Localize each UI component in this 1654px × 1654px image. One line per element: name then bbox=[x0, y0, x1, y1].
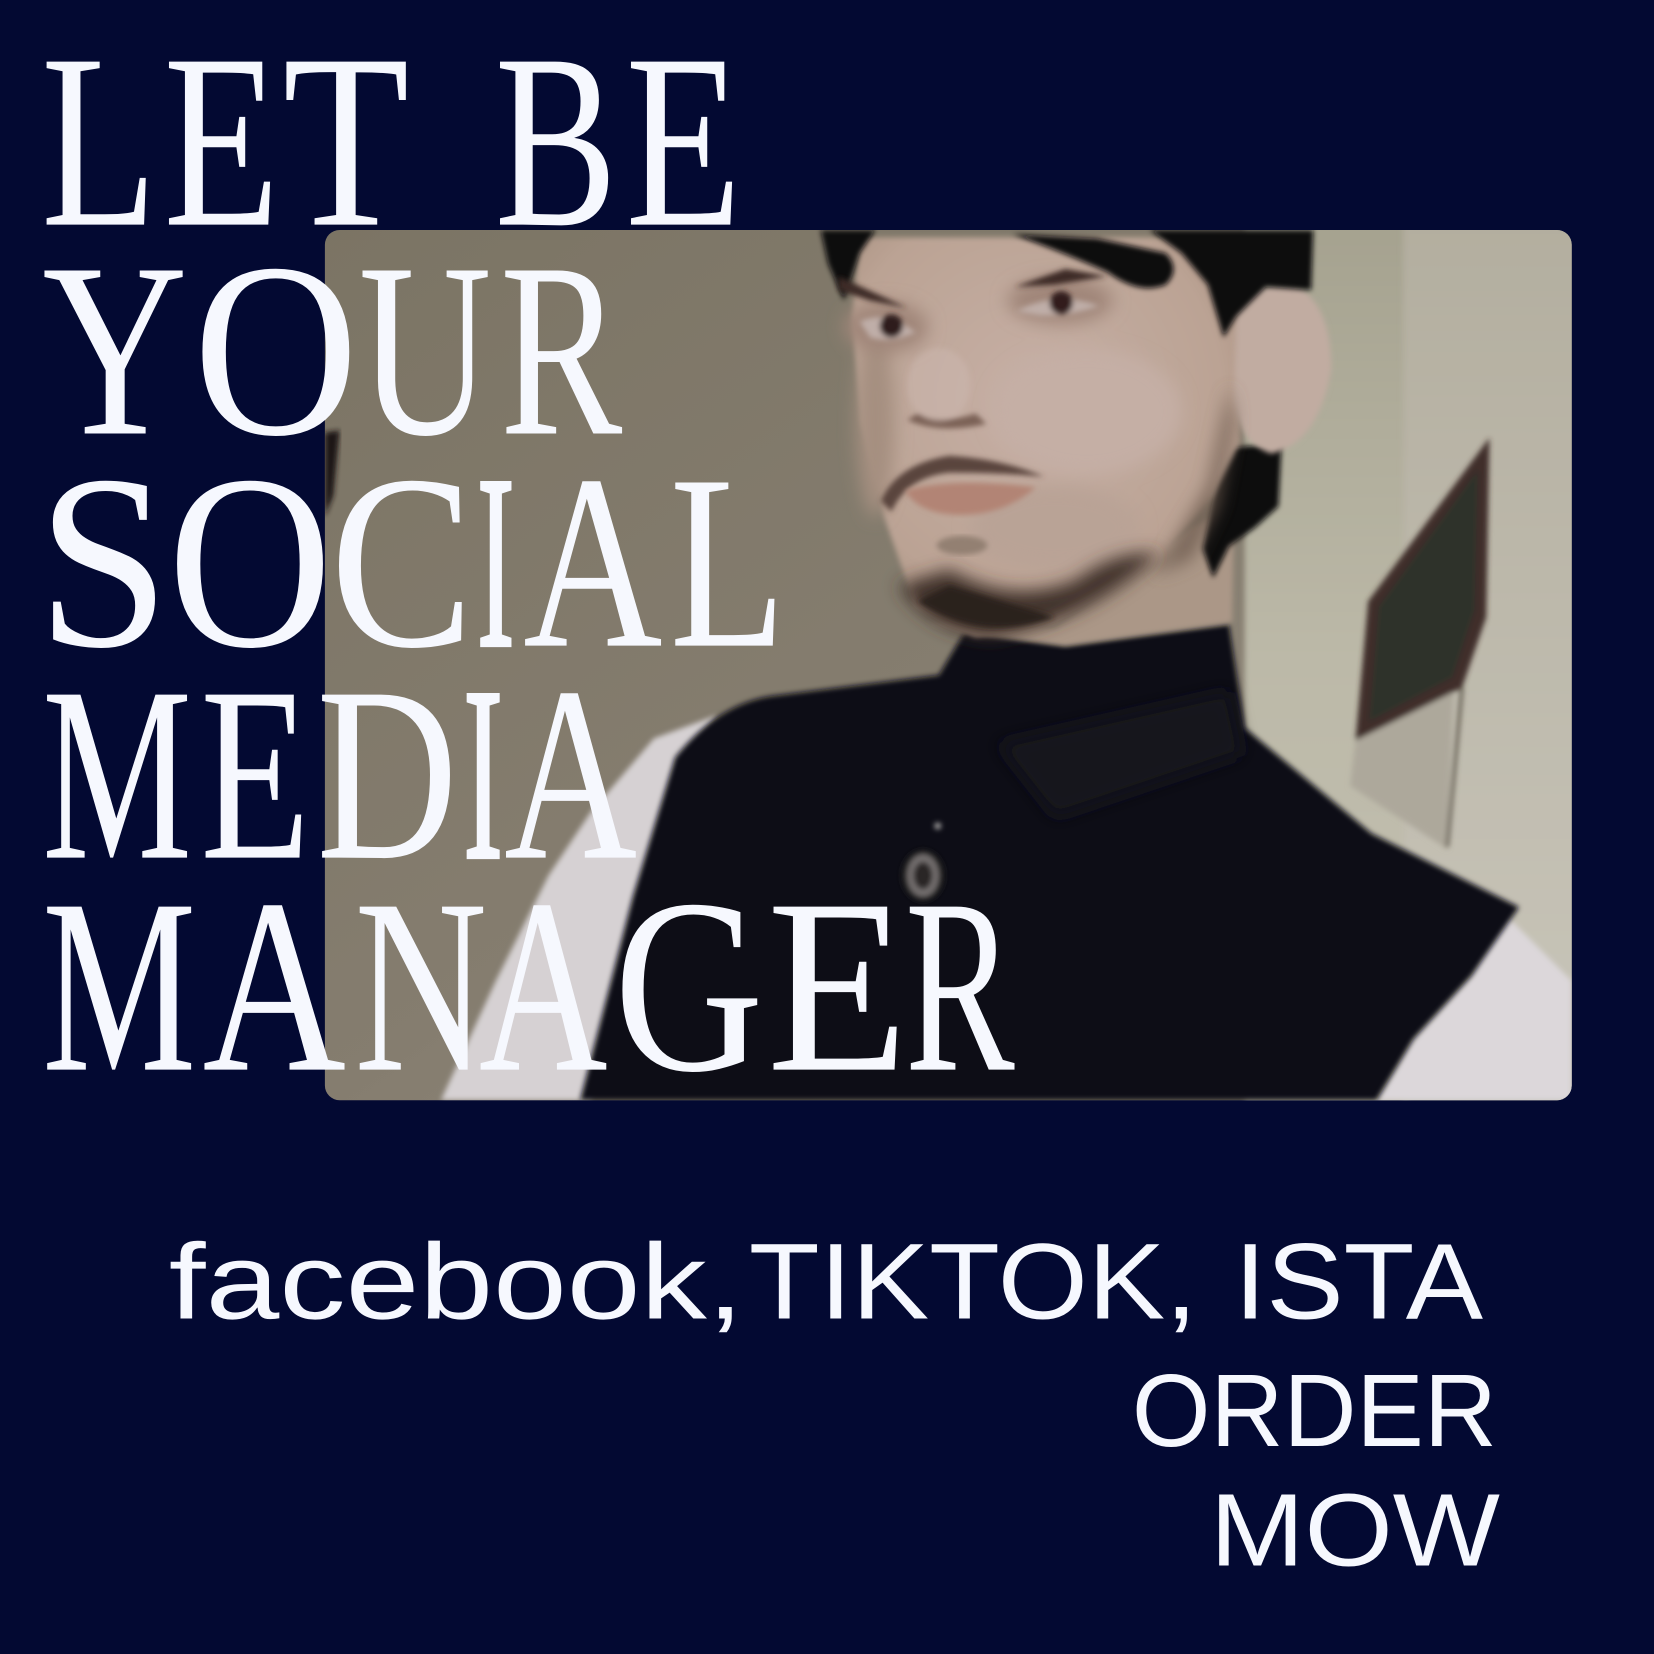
headline line: MANAGER: M bbox=[42, 848, 196, 1124]
headline line: MANAGER: E bbox=[767, 848, 908, 1124]
headline line: MANAGER: G bbox=[614, 848, 764, 1124]
headline line: MANAGER: A bbox=[203, 848, 346, 1124]
headline line: SOCIAL: O bbox=[168, 424, 332, 700]
headline line: YOUR: Y bbox=[42, 212, 188, 488]
eyes bbox=[860, 317, 916, 340]
facial features bbox=[839, 269, 1108, 428]
mow text: MOW bbox=[1210, 1471, 1500, 1587]
headline line: LET BE: L bbox=[41, 3, 157, 279]
headline line: MEDIA: D bbox=[316, 636, 458, 912]
mouth and beard bbox=[881, 456, 1160, 638]
headline line: MANAGER: A bbox=[479, 848, 608, 1124]
headline line: LET BE: E bbox=[626, 3, 742, 279]
headline line: SOCIAL: S bbox=[37, 424, 170, 700]
headline line: YOUR: R bbox=[500, 212, 622, 488]
lips bbox=[905, 483, 1036, 515]
man's vest bbox=[580, 624, 1519, 1100]
mustache bbox=[881, 456, 1044, 512]
hair bbox=[821, 230, 1313, 338]
brows bbox=[839, 269, 1108, 308]
headline line: YOUR: U bbox=[359, 212, 492, 488]
neck bbox=[940, 521, 1236, 650]
headline line: MEDIA: A bbox=[504, 636, 637, 912]
nose bbox=[907, 414, 986, 428]
hair behind ear bbox=[1203, 443, 1282, 578]
headline line: MEDIA: E bbox=[200, 636, 310, 912]
headline bbox=[37, 3, 1015, 1124]
headline line: SOCIAL: I bbox=[477, 424, 515, 700]
beard bbox=[899, 553, 1160, 638]
face shading bbox=[840, 274, 1178, 518]
photo wall bbox=[316, 222, 1582, 1108]
photo: portrait of man in black vest bbox=[316, 222, 1582, 1108]
headline line: MEDIA: I bbox=[463, 636, 503, 912]
headline line: MANAGER: R bbox=[905, 848, 1015, 1124]
platforms line: facebook, bbox=[169, 1222, 744, 1342]
man's shirt bbox=[441, 715, 1572, 1100]
headline line: SOCIAL: A bbox=[523, 424, 662, 700]
platforms line: TIKTOK, bbox=[749, 1222, 1197, 1342]
headline line: SOCIAL: L bbox=[670, 424, 786, 700]
ear bbox=[1234, 285, 1331, 454]
headline line: YOUR: O bbox=[193, 212, 359, 488]
headline line: SOCIAL: C bbox=[330, 424, 474, 700]
headline line: LET BE: E bbox=[164, 3, 280, 279]
vest button bbox=[901, 823, 945, 902]
sideburn stubble bbox=[1155, 385, 1234, 575]
face bbox=[852, 237, 1245, 637]
headline line: MEDIA: M bbox=[42, 636, 192, 912]
headline line: MANAGER: N bbox=[354, 848, 487, 1124]
headline line: LET BE: B bbox=[495, 3, 617, 279]
picture frame on wall bbox=[1350, 438, 1489, 849]
headline line: LET BE: T bbox=[283, 3, 409, 279]
platforms line: ISTA bbox=[1234, 1222, 1483, 1342]
order text: ORDER bbox=[1132, 1352, 1497, 1468]
